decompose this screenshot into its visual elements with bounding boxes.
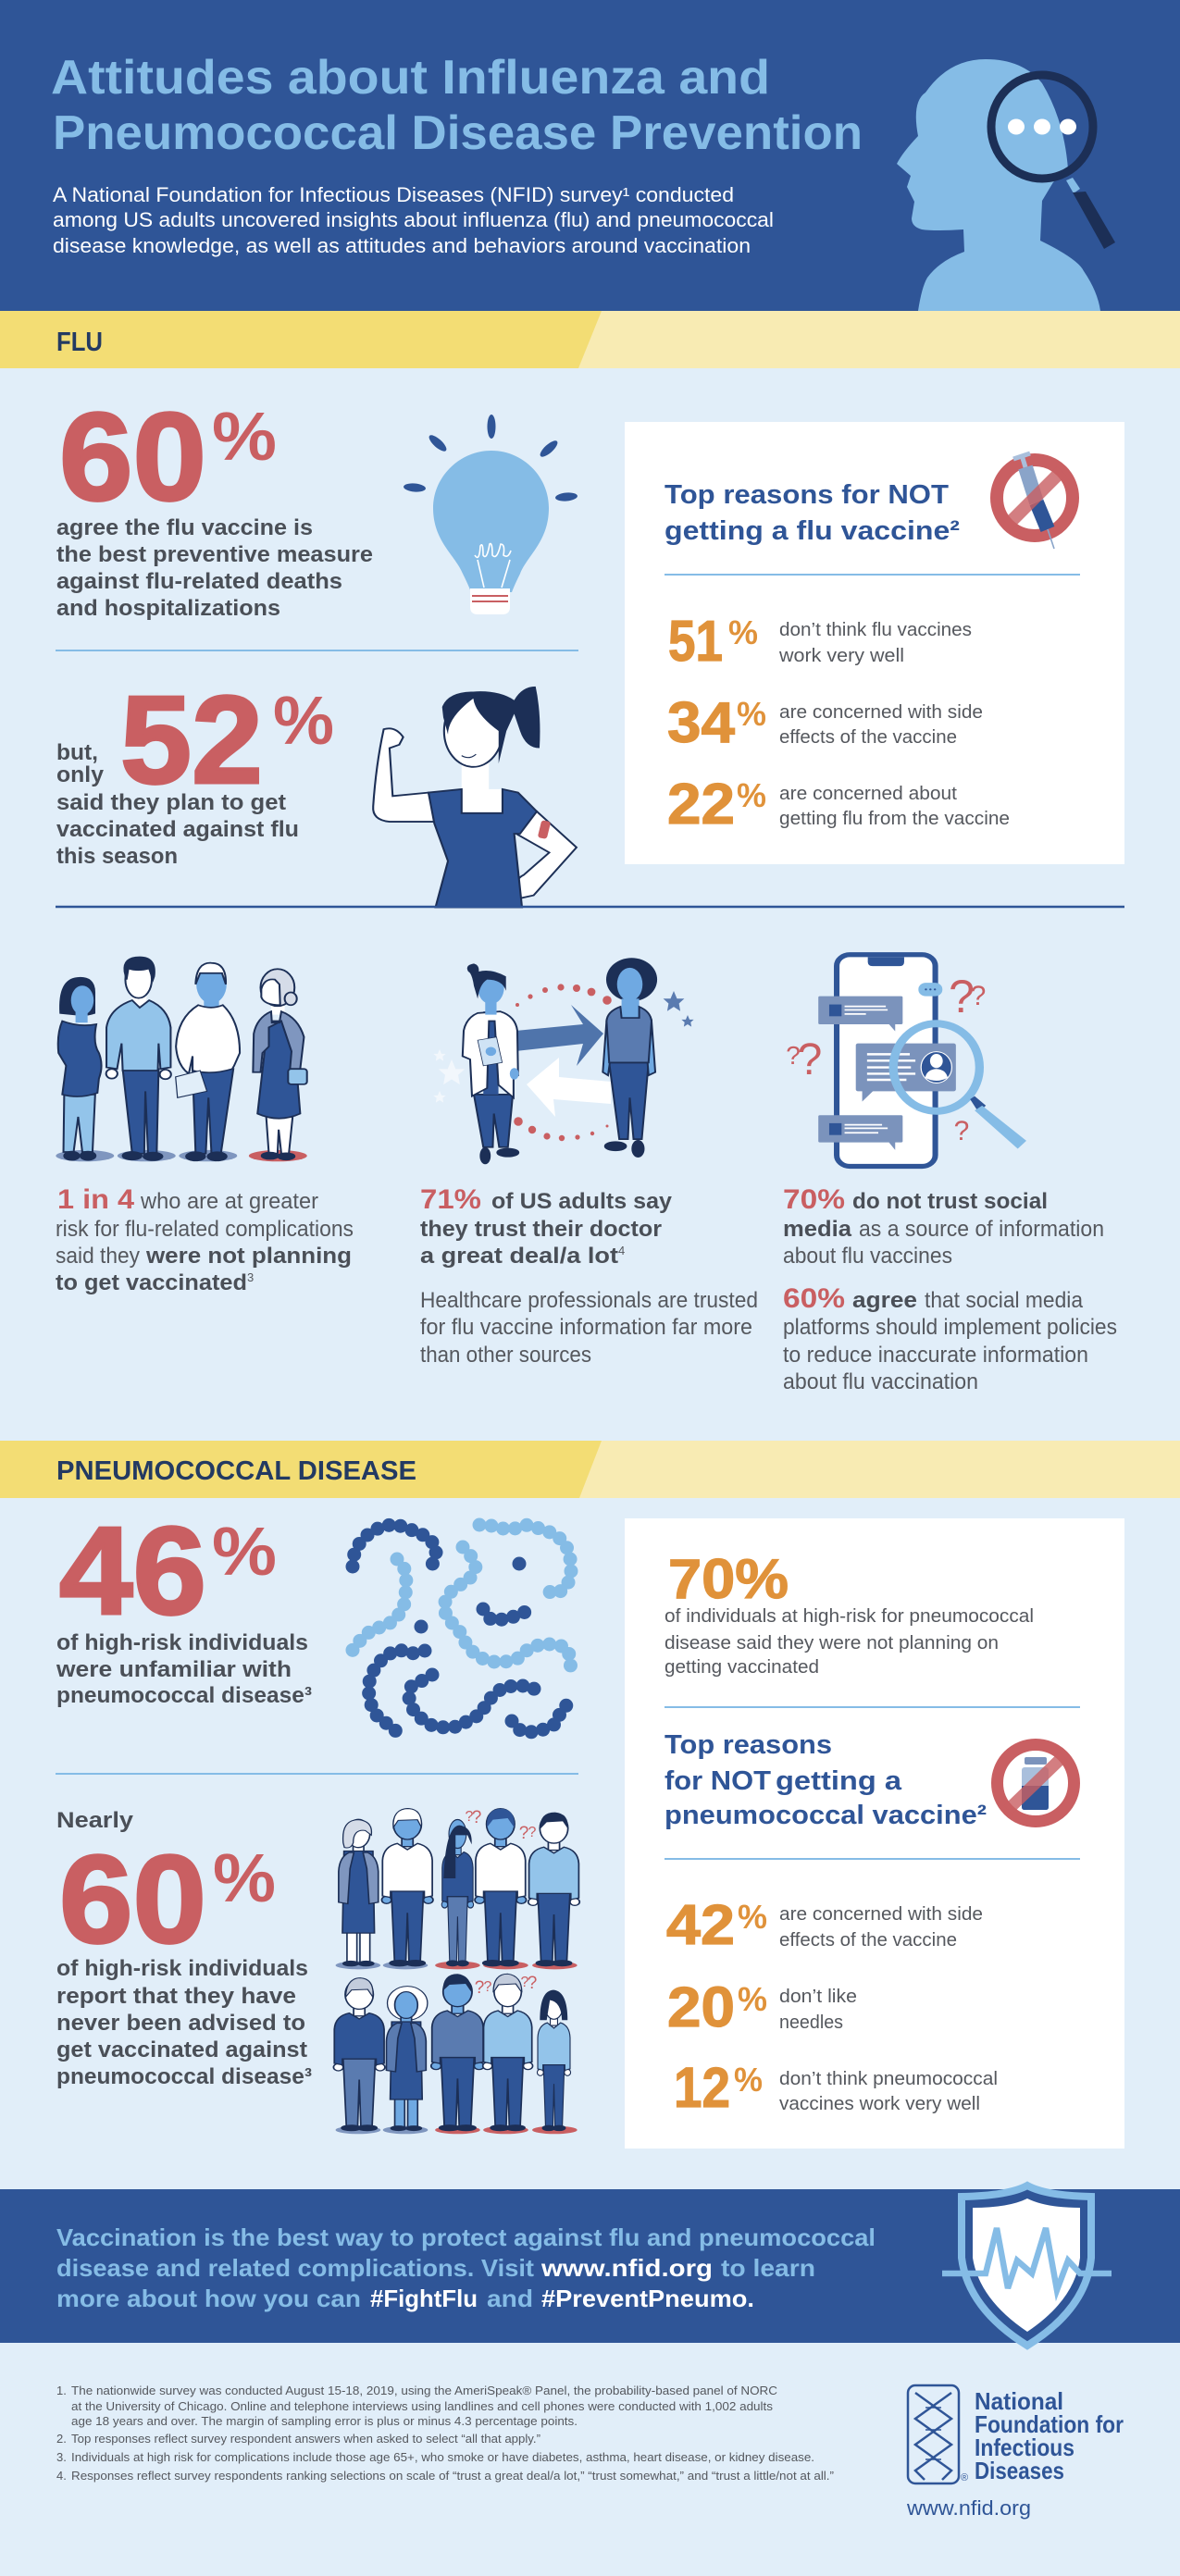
logo: National Foundation for Infectious Diseases: Diseases — [975, 2457, 1064, 2484]
stat: 12% — [674, 2056, 998, 2119]
stat: 51%: work very well — [778, 646, 904, 666]
text: 1 in 4: risk for flu-related complications — [56, 1217, 354, 1242]
person: man in white sweater — [176, 963, 240, 1160]
stat: 22%: are concerned about — [779, 784, 957, 804]
stat: 22%: % — [737, 776, 766, 814]
question marks: ? — [521, 1975, 529, 1990]
intro text: A National Foundation for Infectious Diseases (NFID) survey¹ conducted — [53, 183, 734, 206]
footnotes: Top responses reflect survey respondent answers when asked to select “all that apply.” — [71, 2432, 540, 2446]
text block: of high-risk individuals — [56, 1630, 308, 1655]
stat: 34%: 34 — [667, 691, 736, 755]
logo: National Foundation for Infectious Diseases: National — [975, 2387, 1063, 2415]
question marks: ? — [786, 1041, 801, 1070]
stat: 42%: effects of the vaccine — [779, 1930, 957, 1951]
icon: light bulb — [404, 415, 578, 614]
text: 71% trust their doctor: Healthcare professionals are trusted — [420, 1288, 758, 1313]
question marks: ? — [954, 1116, 969, 1146]
text block: get vaccinated against — [56, 2037, 307, 2062]
stat: 70%: of individuals at high-risk for pneumococcal — [665, 1606, 1034, 1627]
stat: 52% plan to get vaccinated: only — [56, 762, 105, 787]
call to action text: to learn — [721, 2254, 815, 2282]
text: social media trust: to reduce inaccurate information — [783, 1343, 1088, 1368]
post: bottom bubble — [818, 1115, 902, 1150]
text block — [56, 1630, 312, 1708]
question marks: ? — [519, 1824, 528, 1843]
stat: nearly 60% never advised: 60 — [59, 1829, 206, 1969]
logo: National Foundation for Infectious Diseases: Foundation for — [975, 2410, 1124, 2438]
text: 1 in 4: to get vaccinated — [56, 1270, 247, 1295]
stat: 52% plan to get vaccinated: 52 — [120, 670, 263, 810]
icon: magnifying glass — [893, 1023, 1026, 1149]
stat: 46% unfamiliar: % — [212, 1513, 277, 1590]
panel: top reasons for not getting a flu vaccine — [625, 422, 1124, 864]
stat: 46% unfamiliar — [56, 1501, 312, 1708]
panel: flu section band — [0, 311, 1180, 368]
footnotes: 2. — [56, 2432, 67, 2446]
text: 1 in 4 — [56, 1184, 354, 1295]
stat: 42% — [666, 1893, 983, 1956]
stat: 12%: don’t think pneumococcal — [779, 2069, 998, 2089]
question marks: ? — [528, 1974, 537, 1993]
text: 71% trust their doctor: for flu vaccine information far more — [420, 1315, 752, 1340]
person row 2: man in slate sweater — [431, 1974, 484, 2131]
title: Attitudes about Influenza and — [51, 51, 770, 105]
stat: nearly 60% never advised: % — [213, 1839, 276, 1916]
heading: FLU: FLU — [56, 328, 103, 357]
footnotes: at the University of Chicago. Online and telephone interviews using landlines and cell phones were conducted with 1,002 adults — [71, 2399, 774, 2413]
text block: agree the flu vaccine is — [56, 515, 313, 540]
text block: pneumococcal disease³ — [56, 2064, 312, 2089]
icon: crossed-out vaccine vial — [998, 1745, 1074, 1821]
question marks: ? — [971, 981, 986, 1011]
question marks: ? — [528, 1825, 537, 1840]
heading — [665, 1730, 987, 1830]
stat: 34%: % — [737, 695, 766, 733]
title — [51, 51, 863, 160]
stat: 70%: disease said they were not planning on — [665, 1633, 999, 1653]
heading: getting a — [776, 1766, 902, 1796]
panel: pneumococcal stats and reasons — [625, 1518, 1124, 2149]
person row 2: older woman curly hair — [386, 1987, 428, 2131]
heading: Top reasons for NOT — [665, 480, 949, 510]
post: top bubble — [818, 997, 902, 1032]
text: social media trust: as a source of information — [859, 1217, 1104, 1242]
stat: 70% — [665, 1548, 1034, 1678]
logo: National Foundation for Infectious Diseases: ® — [961, 2472, 968, 2483]
person: woman in cardigan — [253, 969, 307, 1159]
stat: nearly 60% never advised: Nearly — [56, 1808, 134, 1833]
call to action text: www.nfid.org — [540, 2254, 713, 2282]
call to action text: #FightFlu — [370, 2285, 478, 2312]
stat: 51%: % — [728, 613, 758, 651]
stat: 52% plan to get vaccinated: but, — [56, 740, 98, 765]
icon: head with magnifying glass — [897, 59, 1115, 311]
person row 1: woman long hair — [441, 1820, 474, 1966]
text block: the best preventive measure — [56, 542, 373, 567]
text block: against flu-related deaths — [56, 569, 342, 594]
illustration: doctor and patient exchanging trust — [433, 958, 694, 1163]
heading — [665, 480, 960, 546]
stat: 51%: don’t think flu vaccines — [779, 620, 972, 640]
stat: 20%: needles — [779, 2012, 843, 2033]
text block: of high-risk individuals — [56, 1956, 308, 1981]
question marks — [786, 971, 986, 1146]
text: social media trust: agree — [852, 1288, 917, 1313]
illustration: four high-risk people — [56, 957, 307, 1161]
heading: Top reasons — [665, 1730, 832, 1760]
stat: 51% — [668, 610, 972, 674]
illustration: ten people — [333, 1808, 579, 2134]
text block: report that they have — [56, 1984, 296, 2009]
stat: 34% — [667, 691, 983, 755]
stat: 42%: 42 — [666, 1893, 735, 1956]
text block: and hospitalizations — [56, 596, 280, 621]
stat: 22%: getting flu from the vaccine — [779, 809, 1010, 829]
stat: 12%: 12 — [674, 2056, 730, 2119]
text: social media trust: that social media — [925, 1288, 1084, 1313]
call to action text: and — [487, 2285, 533, 2312]
stat: 12%: vaccines work very well — [779, 2094, 980, 2114]
icon: crossed-out syringe — [997, 453, 1073, 549]
person row 1: man in blue sweater — [528, 1813, 579, 1966]
text: social media trust: about flu vaccines — [783, 1244, 952, 1269]
heading: getting a flu vaccine² — [665, 516, 960, 546]
stat: 34%: effects of the vaccine — [779, 727, 957, 748]
stat: 42%: % — [738, 1898, 767, 1936]
footnotes: 4. — [56, 2469, 67, 2483]
question marks: ? — [484, 1979, 492, 1995]
stat: 46% unfamiliar: 46 — [59, 1501, 206, 1641]
text: social media trust — [783, 1184, 1117, 1394]
footnotes: The nationwide survey was conducted August 15-18, 2019, using the AmeriSpeak® Panel, the probability-based panel of NORC — [71, 2384, 777, 2397]
question marks: ? — [798, 1035, 822, 1084]
call to action text: Vaccination is the best way to protect against flu and pneumococcal — [56, 2223, 876, 2251]
text block: vaccinated against flu — [56, 817, 299, 842]
website: www.nfid.org — [906, 2496, 1031, 2520]
logo: National Foundation for Infectious Diseases — [906, 2385, 1124, 2520]
question marks: ? — [475, 1978, 484, 1998]
intro text: among US adults uncovered insights about influenza (flu) and pneumococcal — [53, 208, 774, 231]
stat: 60% agree — [56, 387, 373, 621]
stat: 12%: % — [734, 2061, 763, 2099]
panel: pneumococcal section band — [0, 1441, 1180, 1498]
arrow: white to doctor — [527, 1058, 611, 1117]
stat: 60% agree: % — [212, 398, 277, 475]
footnotes: Responses reflect survey respondents ranking selections on scale of “trust a great deal/a lot,” “trust somewhat,” and “trust a little/not at all.” — [71, 2469, 834, 2483]
call to action text: #PreventPneumo. — [541, 2285, 754, 2312]
person row 1: man in white tee — [381, 1809, 433, 1966]
person row 2: man in navy sweater — [333, 1978, 385, 2131]
stat: 52% plan to get vaccinated: % — [273, 682, 334, 759]
stat: 22%: 22 — [667, 773, 735, 836]
text block — [56, 790, 299, 869]
arrow: dark blue to patient — [515, 1005, 603, 1066]
footnotes: 1. — [56, 2384, 67, 2397]
question marks: ? — [466, 1809, 474, 1825]
stat: 34%: are concerned with side — [779, 702, 983, 723]
text block: said they plan to get — [56, 790, 286, 815]
text: social media trust: 70% — [783, 1184, 845, 1215]
text: social media trust: platforms should implement policies — [783, 1315, 1117, 1340]
call to action text: disease and related complications. Visit — [56, 2254, 534, 2282]
footnotes: 3. — [56, 2450, 67, 2464]
question marks: ? — [472, 1808, 481, 1827]
stat: 70%: getting vaccinated — [665, 1657, 819, 1678]
stat: 52% plan to get vaccinated — [56, 670, 334, 869]
stat: 20%: don’t like — [779, 1987, 857, 2007]
question marks: ? — [949, 971, 975, 1022]
illustration: phone with social media posts — [786, 955, 1026, 1166]
intro text: disease knowledge, as well as attitudes and behaviors around vaccination — [53, 234, 751, 257]
logo: National Foundation for Infectious Diseases: Infectious — [975, 2434, 1074, 2461]
text: 1 in 4: were not planning — [145, 1244, 352, 1269]
person: pregnant woman — [58, 978, 102, 1160]
text: 1 in 4: who are at greater — [140, 1189, 318, 1214]
footnotes — [56, 2384, 834, 2483]
text: social media trust: media — [783, 1217, 852, 1242]
stat: 20%: % — [738, 1980, 767, 2018]
person row 1: man in white sweater — [475, 1809, 527, 1966]
person row 2: woman in light tee — [537, 1990, 571, 2131]
title: Pneumococcal Disease Prevention — [53, 106, 863, 160]
stat: 20%: 20 — [667, 1975, 735, 2038]
text block: were unfamiliar with — [56, 1657, 292, 1682]
text: 71% trust their doctor: 71% — [420, 1184, 481, 1215]
question marks — [466, 1808, 537, 1998]
icon: shield with heartbeat — [942, 2186, 1112, 2346]
icon: DNA helix mark — [908, 2385, 959, 2483]
heading: pneumococcal vaccine² — [665, 1801, 987, 1830]
person row 2: man in light tee — [483, 1974, 533, 2131]
stat: 70%: 70% — [668, 1548, 789, 1610]
text: 71% trust their doctor: of US adults say — [491, 1189, 673, 1214]
text: 1 in 4: said they — [56, 1244, 140, 1269]
footnotes: age 18 years and over. The margin of sampling error is plus or minus 4.3 percentage points. — [71, 2414, 578, 2428]
text: 71% trust their doctor: a great deal/a lot — [420, 1244, 618, 1269]
text: 1 in 4: 1 in 4 — [57, 1184, 134, 1215]
text: 71% trust their doctor: 4 — [618, 1244, 625, 1257]
text block — [56, 1956, 312, 2089]
text: social media trust: about flu vaccination — [783, 1369, 978, 1394]
heading: pneumococcal disease: PNEUMOCOCCAL DISEASE — [56, 1456, 416, 1486]
text: 71% trust their doctor: than other sources — [420, 1343, 591, 1368]
stat: 51%: 51 — [668, 610, 723, 674]
panel: call to action band — [0, 2186, 1180, 2346]
person: man in blue sweater — [106, 957, 171, 1160]
stat: 22% — [667, 773, 1010, 836]
stat: nearly 60% never advised — [56, 1808, 312, 2089]
text: 71% trust their doctor: they trust their doctor — [420, 1217, 662, 1242]
panel: header — [0, 0, 1180, 311]
footnotes: Individuals at high risk for complications include those age 65+, who smoke or have diabetes, asthma, heart disease, or kidney disease. — [71, 2450, 814, 2464]
call to action text: more about how you can — [56, 2285, 361, 2312]
stat: 42%: are concerned with side — [779, 1904, 983, 1925]
person: doctor — [463, 963, 519, 1163]
post: center bubble — [856, 1044, 956, 1101]
heading: for NOT — [665, 1766, 771, 1796]
text block: never been advised to — [56, 2011, 305, 2036]
text: social media trust: 60% — [783, 1283, 845, 1314]
text: social media trust: do not trust social — [852, 1189, 1048, 1214]
icon: woman flexing with bandage — [373, 687, 577, 908]
stat: 20% — [667, 1975, 857, 2038]
text block: pneumococcal disease³ — [56, 1683, 312, 1708]
stat: 60% agree: 60 — [59, 387, 206, 526]
intro text — [53, 183, 774, 257]
call to action text — [56, 2223, 876, 2312]
person: patient — [602, 958, 657, 1157]
person row 1: older woman — [339, 1819, 379, 1966]
illustration: pneumococcal bacteria chains — [353, 1524, 571, 1732]
text: 1 in 4: 3 — [247, 1270, 254, 1284]
text block — [56, 515, 373, 621]
text: 71% trust their doctor — [420, 1184, 758, 1368]
text block: this season — [56, 844, 178, 869]
